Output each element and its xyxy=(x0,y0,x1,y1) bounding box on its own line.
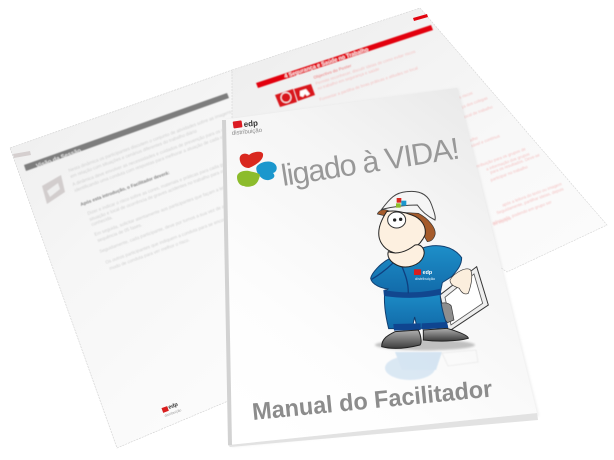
shirt logo: edp xyxy=(423,270,433,276)
left page body text: em relação com situações e cenários diferentes do trabalho diário xyxy=(70,128,198,179)
hair xyxy=(377,210,435,242)
hand on clipboard xyxy=(450,269,472,294)
left page body text: A dinâmica deve envolver as necessidades e cuidados de prevenção para os riscos que xyxy=(72,121,242,187)
logo: edp on left page xyxy=(161,402,182,418)
right page body text: responsável e contínua xyxy=(458,133,501,153)
left page body text: Dizer e indicar o risco sobre as cores, materiais e práticas para cada grupo de trabalho xyxy=(87,151,255,216)
panel: right inner page xyxy=(232,8,607,272)
waist belt xyxy=(383,289,441,298)
right page body text: Seguidamente, partilhar ideias, depois xyxy=(496,186,564,215)
right page body text: adequada, podendo em grupo ser xyxy=(491,199,553,226)
right page body text: para os resultados. Deve-se xyxy=(489,152,541,175)
title: ligado a VIDA: ligado à VIDA! xyxy=(279,131,462,193)
icon: clock and exit badges xyxy=(275,84,315,107)
hard hat xyxy=(382,191,435,220)
left page body text: situação e local de ocorrência de graves acidentes no trabalho para os participantes xyxy=(89,158,252,222)
logo: edp distribuicao: distribuição xyxy=(232,128,263,137)
left page body text: Seguidamente, cada participante, deve por turnos a sua vez de atuar sobre a imagem xyxy=(99,189,265,254)
right page body text: Permite reconhecer, discutir ideias de como evitar riscos xyxy=(315,49,416,86)
right page body text: a informação dos grupos xyxy=(485,151,530,172)
right page body text: no trabalho em segurança e saúde xyxy=(317,66,380,91)
logo: edp distribuicao xyxy=(232,119,263,137)
right page body text: Fomentar a partilha de boas práticas e atitudes no local xyxy=(319,65,418,102)
right page body text: da equipa. xyxy=(492,215,512,227)
icon: four coloured hearts xyxy=(237,152,277,187)
right page body text: atitudes seguras no local de trabalho xyxy=(427,104,494,132)
logo: edp on left page: distribuição xyxy=(164,408,182,418)
left page body text: modo de conduta para ver melhor o risco. xyxy=(109,237,190,271)
red heading bar xyxy=(256,25,433,88)
torso and arms xyxy=(371,246,462,294)
character reflection xyxy=(385,350,478,380)
panel: front cover xyxy=(222,88,539,447)
left page body text: sequência de 05 fases. xyxy=(97,222,143,243)
shoes xyxy=(382,330,421,348)
face xyxy=(379,211,425,253)
suit seam xyxy=(372,262,408,293)
legs xyxy=(384,290,447,329)
right page body text: promover a segurança dos colegas xyxy=(425,95,488,122)
left page body text: Após esta introdução, o Facilitador deverá: xyxy=(80,170,171,207)
right page body text: de trabalho xyxy=(457,135,479,147)
icon: session image xyxy=(42,175,65,204)
left page body text: Os outros participantes que indiquem a conduta para se encontrar no trabalho xyxy=(105,206,256,265)
hat emblem xyxy=(396,198,406,208)
shirt logo: distribuição xyxy=(415,276,436,281)
hand on chin xyxy=(388,245,424,267)
right page body text: reduzir os riscos xyxy=(443,90,473,105)
left page body text: identificando uma conduta com respostas para melhorar a atuação de cada um no trabalho xyxy=(74,125,250,193)
clipboard xyxy=(437,267,488,332)
red heading bar: 4 Segurança e Saúde no Trabalho xyxy=(284,47,370,80)
left page body text: conhecida. xyxy=(91,215,113,227)
mascot: worker with clipboard xyxy=(371,191,488,350)
left page body text: Em seguida, solicitar atentamente aos participantes que façam a leitura da sequência xyxy=(94,173,259,237)
panel: left inner page xyxy=(10,70,265,448)
page heading bar xyxy=(24,93,229,171)
trouser cuffs xyxy=(393,322,448,331)
shirt logo xyxy=(414,269,436,281)
right page body text: participar no trabalho xyxy=(490,164,529,182)
header tab xyxy=(13,151,31,158)
right page body text: contribuição para os grupos de xyxy=(471,146,527,171)
left page body text xyxy=(68,105,265,271)
logo: edp distribuicao: edp xyxy=(243,119,258,129)
right page body text: Objectivo do Poster xyxy=(313,63,352,80)
left page body text: Nesta dinâmica os participantes discutem o conjunto de atividades sobre as imagens e os xyxy=(68,105,242,173)
red header tab xyxy=(413,14,428,21)
title: Manual do Facilitador: Manual do Facilitador xyxy=(251,376,493,426)
right page body text xyxy=(313,49,564,227)
right page body text: após a leitura do texto ou imagem xyxy=(501,181,563,208)
eyes xyxy=(388,212,406,228)
page heading bar: Visão da Sessão xyxy=(36,148,82,170)
logo: edp on left page: edp xyxy=(168,402,179,411)
